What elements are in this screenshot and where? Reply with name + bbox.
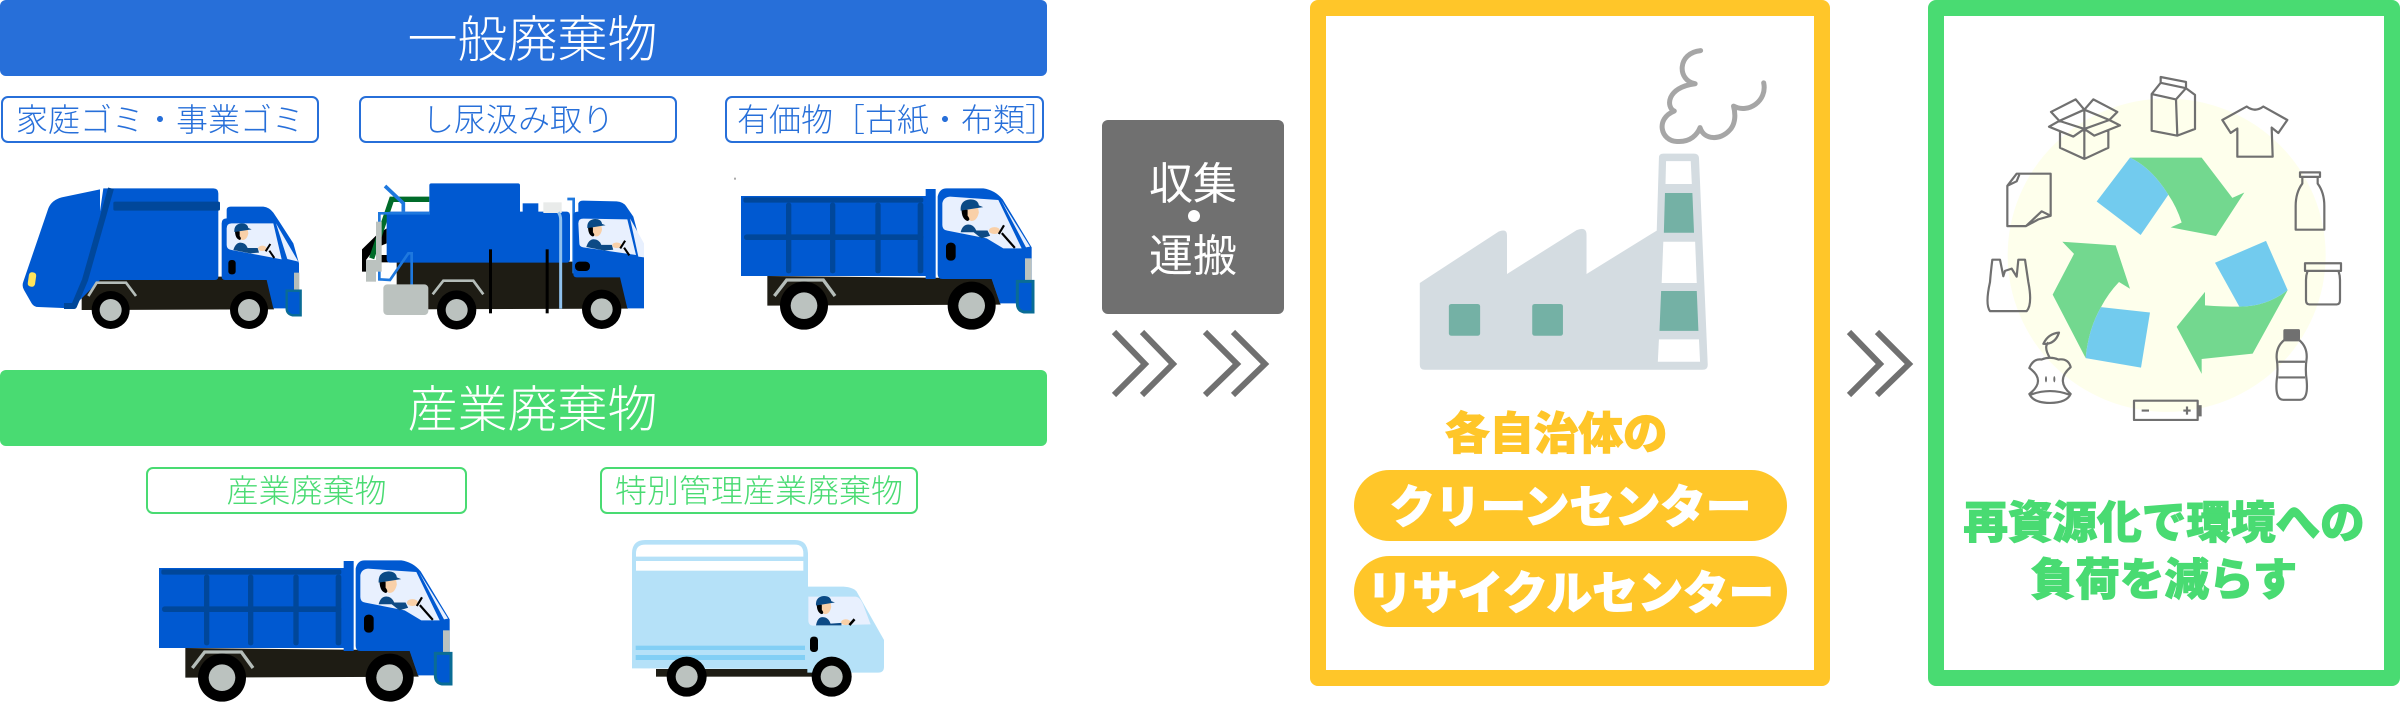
- recycling arrow: left: [2053, 242, 2150, 368]
- label: night soil collection: [359, 96, 677, 143]
- panel: treatment centers: [1310, 0, 1830, 686]
- illustration: recycling symbol with materials: [1986, 76, 2342, 421]
- icon: apple core: [2029, 333, 2071, 403]
- label: night soil collection: し尿汲み取り: [422, 102, 614, 138]
- icon: milk bottle: [2296, 172, 2324, 230]
- icon: milk carton: [2152, 77, 2195, 136]
- label: industrial waste: 産業廃棄物: [226, 473, 386, 509]
- icon: battery: [2134, 401, 2198, 420]
- pill: recycling center: リサイクルセンター: [1367, 568, 1774, 619]
- text: each municipality: 各自治体の: [1445, 410, 1668, 459]
- heading: industrial waste banner: [0, 370, 1047, 446]
- label: industrial waste: [146, 467, 467, 514]
- pill: clean center: [1354, 470, 1787, 541]
- text: reduce environmental load: 負荷を減らす: [2031, 556, 2297, 605]
- label: specially controlled industrial waste: 特別管理産業廃棄物: [615, 473, 903, 509]
- icon: t-shirt: [2222, 107, 2287, 157]
- text: reduce environmental load: 再資源化で環境への: [1963, 499, 2365, 548]
- icon: cardboard box: [2049, 99, 2120, 159]
- icon: jar: [2305, 263, 2341, 304]
- icon: garbage compactor truck: [22, 188, 302, 329]
- panel: collection and transport: 運搬: [1149, 232, 1237, 281]
- arrow: double chevrons to treatment: [1112, 330, 1270, 398]
- pill: recycling center: [1354, 556, 1787, 627]
- icon: plastic bag: [1988, 260, 2030, 311]
- arrow: double chevrons to recycling: [1846, 330, 1914, 398]
- panel: recycling result: [1928, 0, 2400, 686]
- background circle: [2008, 98, 2326, 412]
- label: household and business waste: [1, 96, 319, 143]
- label: household and business waste: 家庭ゴミ・事業ゴミ: [16, 102, 304, 138]
- label: specially controlled industrial waste: [600, 467, 918, 514]
- heading: general waste banner: 一般廃棄物: [408, 12, 658, 68]
- pill: clean center: クリーンセンター: [1390, 482, 1751, 533]
- heading: general waste banner: [0, 0, 1047, 76]
- icon: vacuum truck: [362, 183, 644, 330]
- icon: dump truck for valuables: [734, 178, 1034, 330]
- panel: collection and transport: 収集: [1149, 160, 1237, 209]
- icon: light blue box van: [632, 540, 884, 697]
- text: reduce environmental load: [1963, 499, 2365, 605]
- icon: PET bottle: [2276, 340, 2307, 400]
- label: valuables: 有価物［古紙・布類］: [737, 102, 1057, 138]
- material icons: [1988, 77, 2341, 420]
- recycling arrow: right: [2177, 241, 2288, 374]
- icon: dump truck for industrial waste: [159, 560, 452, 702]
- recycling arrow: top: [2097, 158, 2244, 236]
- panel: collection and transport: [1102, 120, 1284, 314]
- icon: paper sheet: [2007, 174, 2051, 226]
- heading: industrial waste banner: 産業廃棄物: [408, 382, 658, 438]
- icon: factory with smoke: [1420, 48, 1767, 370]
